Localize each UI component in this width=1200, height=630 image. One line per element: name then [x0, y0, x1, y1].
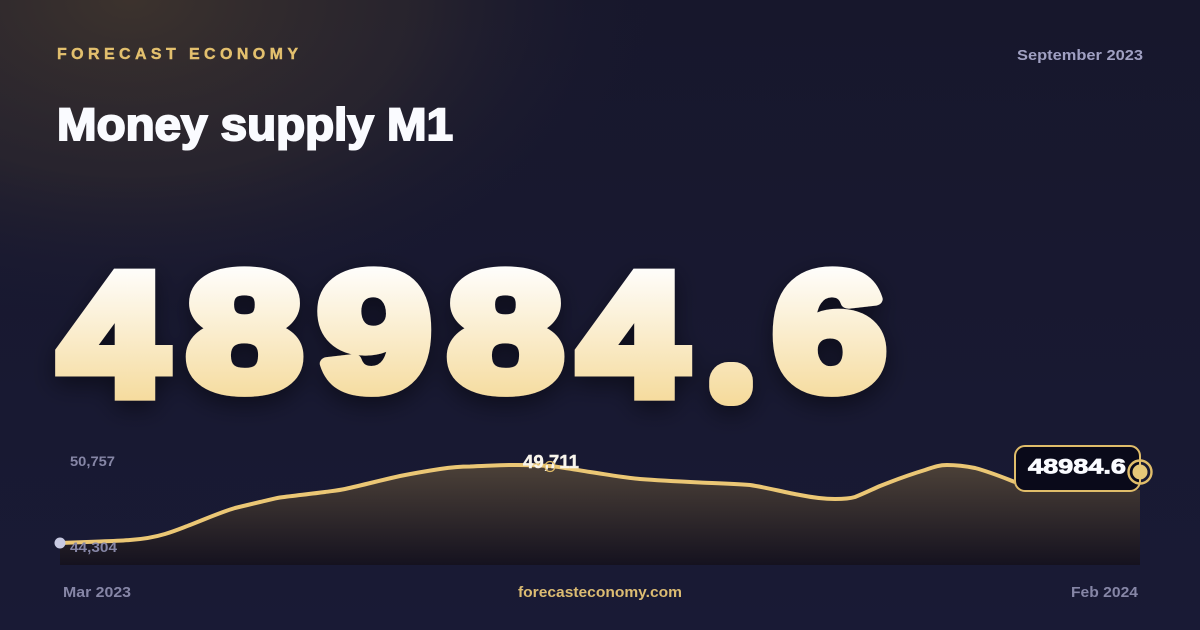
peak value label: 49,711	[523, 452, 579, 472]
headline value: 4	[60, 239, 166, 431]
chart area fill	[60, 465, 1140, 565]
end point marker	[1128, 460, 1152, 484]
start point marker	[54, 538, 66, 548]
headline value: .	[725, 352, 737, 396]
y-axis maximum: 50,757	[70, 454, 115, 469]
current value callout: 48984.6	[1028, 456, 1126, 478]
headline value: 4	[580, 239, 685, 431]
headline value	[60, 239, 886, 431]
x-axis start label: Mar 2023	[63, 585, 131, 601]
headline value: 8	[187, 239, 302, 424]
area chart	[54, 446, 1152, 565]
eyebrow: brand name: FORECAST ECONOMY	[57, 46, 298, 63]
peak marker	[545, 462, 555, 472]
headline value: 9	[318, 239, 431, 425]
date label: September 2023	[1017, 47, 1143, 64]
website: forecasteconomy.com	[518, 585, 682, 601]
title: Money supply M1	[57, 99, 453, 150]
current value callout	[1015, 446, 1140, 491]
y-axis minimum: 44,304	[70, 540, 118, 555]
x-axis end label: Feb 2024	[1071, 585, 1138, 601]
headline value: 8	[448, 239, 563, 424]
headline value: 6	[773, 239, 886, 425]
chart line	[60, 465, 1040, 543]
